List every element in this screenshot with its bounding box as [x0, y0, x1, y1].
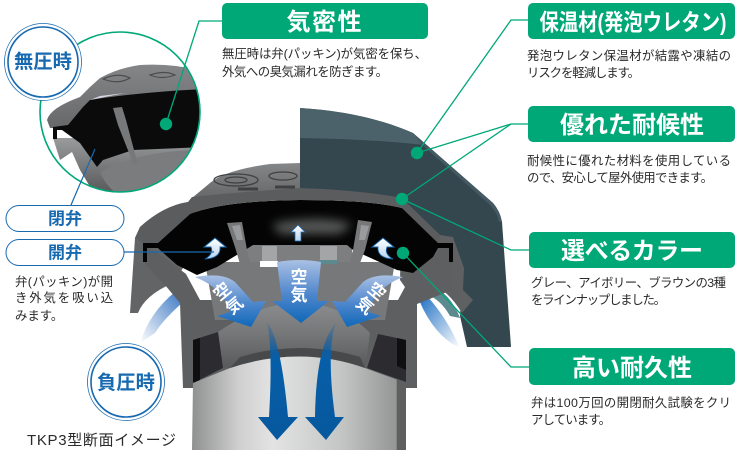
panel: colours: をラインナップしました。: [531, 293, 666, 307]
panel: insulation: リスクを軽減します。: [527, 65, 640, 80]
arrow: down left: [258, 322, 298, 440]
leader: closed valve: [71, 149, 95, 205]
text: open valve description: みます。: [15, 309, 63, 323]
right dark slot: [367, 334, 406, 382]
black air chamber: [143, 200, 453, 275]
dome embossed marks: [214, 172, 297, 189]
leader: open valve: [124, 251, 214, 253]
panel: colours: 選べるカラー: [561, 238, 703, 265]
airflow wedge right: [419, 296, 460, 348]
left dark slot: [193, 332, 223, 383]
right hood: [400, 199, 473, 313]
arrow: down right: [305, 323, 344, 440]
teal gap: [320, 260, 337, 264]
text: open valve description: [15, 274, 113, 323]
badge: no pressure: [4, 24, 82, 100]
inset dome: [47, 65, 205, 128]
leader: durability: [397, 247, 529, 367]
white gap: [260, 261, 278, 267]
left slot shadow: [193, 338, 200, 383]
right slot shadow: [397, 338, 406, 370]
inset black chamber: [53, 89, 205, 167]
chamber reflection: [272, 219, 352, 234]
panel: airtightness: 無圧時は弁(パッキン)が気密を保ち、: [222, 46, 427, 61]
panel: durability: アしています。: [531, 413, 611, 427]
collar: [218, 303, 370, 368]
pipe shoulder dark band: [230, 348, 365, 368]
light sliver under rim: [190, 202, 222, 214]
left hood flap: [130, 202, 195, 313]
arrow: small curved up left: [204, 238, 226, 259]
arrow: air centre: [272, 260, 329, 323]
leader: insulation: [417, 20, 528, 153]
badge: negative pressure: 負圧時: [97, 372, 155, 394]
left rib: [227, 222, 260, 298]
panel: durability: [529, 348, 735, 427]
arrow: air left: 空: [210, 279, 235, 305]
insulation cover (dark teal): [300, 108, 511, 347]
panel: insulation: [527, 3, 735, 80]
pill: closed valve: 閉弁: [48, 208, 82, 228]
arrow: air right: 気: [352, 293, 377, 319]
panel: airtightness: 外気への臭気漏れを防ぎます。: [222, 64, 388, 79]
arrow: air right: [332, 275, 403, 327]
caption: TKP3型断面イメージ: [27, 432, 176, 449]
panel: durability: 高い耐久性: [572, 355, 692, 382]
inset rib: [113, 107, 136, 159]
panel: weather resistance: ので、安心して屋外使用できます。: [527, 170, 713, 185]
badge: negative pressure: [88, 344, 164, 420]
interior backdrop: [205, 262, 395, 320]
arrow: air right: 空: [364, 279, 389, 305]
cap rim band: [135, 188, 440, 243]
leader: airtightness: [160, 21, 222, 130]
badge: no pressure: 無圧時: [14, 51, 72, 73]
arrow: air centre: 空: [290, 268, 308, 287]
panel: weather resistance: [527, 106, 735, 185]
airflow wedge left: [140, 292, 182, 343]
inner wall body: [143, 247, 453, 388]
pill: open valve: 開弁: [48, 242, 82, 262]
text: open valve description: き外気を吸い込: [15, 290, 113, 305]
dome top: [192, 163, 300, 198]
panel: airtightness: [222, 3, 428, 79]
panel: colours: グレー、アイボリー、ブラウンの3種: [531, 275, 726, 290]
arrow: air centre: 気: [290, 286, 308, 305]
inset lower body: [53, 138, 191, 191]
leader: colours: [396, 193, 529, 250]
pill: open valve: [6, 240, 124, 266]
arrow: small up centre: [291, 225, 305, 241]
leader: weather resistance: [402, 124, 528, 199]
text: open valve description: 弁(パッキン)が開: [15, 274, 113, 289]
panel: insulation: 発泡ウレタン保温材が結露や凍結の: [527, 48, 731, 63]
product cross-section: [130, 163, 473, 450]
panel: colours: [529, 232, 735, 307]
inset dome marks: [103, 72, 175, 82]
inset light sliver: [90, 93, 125, 100]
teal ring: [423, 283, 460, 318]
panel: weather resistance: 耐候性に優れた材料を使用している: [527, 153, 731, 168]
arrow: air left: 気: [222, 293, 247, 319]
panel: weather resistance: 優れた耐候性: [560, 112, 704, 139]
panel: airtightness: 気密性: [286, 9, 362, 36]
arrow: small curved up right: [372, 238, 394, 259]
arrow: air left: [195, 275, 266, 327]
right rib: [340, 220, 372, 297]
panel: durability: 弁は100万回の開閉耐久試験をクリ: [531, 395, 731, 410]
pipe: [192, 356, 406, 450]
pill: closed valve: [6, 206, 124, 232]
inset circle: closed valve: [40, 32, 205, 195]
